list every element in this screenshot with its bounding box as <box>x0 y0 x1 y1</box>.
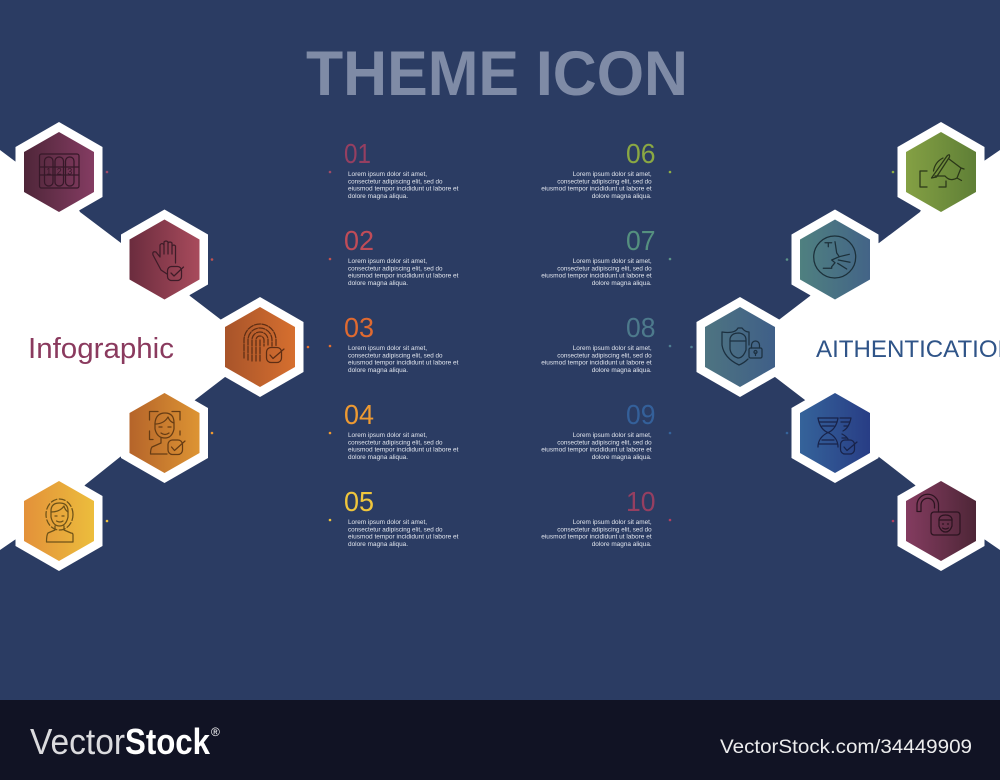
footer image id: VectorStock.com/34449909 <box>720 736 972 758</box>
item 03 <box>344 312 459 374</box>
title: THEME ICON <box>306 39 688 109</box>
item 07 <box>541 225 656 287</box>
item 10: eiusmod tempor incididunt ut labore et <box>541 534 652 541</box>
item 04: consectetur adipiscing elit, sed do <box>348 439 443 446</box>
item 01: dolore magna aliqua. <box>348 193 408 200</box>
item 02: Lorem ipsum dolor sit amet, <box>348 258 427 265</box>
item 08: dolore magna aliqua. <box>592 367 652 374</box>
heading: Infographic: Infographic <box>28 333 174 365</box>
item 04: dolore magna aliqua. <box>348 454 408 461</box>
icon: hand with check <box>153 241 184 280</box>
footer logo: Stock <box>125 721 211 762</box>
item 02 <box>344 225 459 287</box>
item 07: 07 <box>626 225 656 256</box>
item 09 <box>541 399 656 461</box>
item 04 <box>344 399 459 461</box>
item 10: consectetur adipiscing elit, sed do <box>557 526 652 533</box>
item 04: Lorem ipsum dolor sit amet, <box>348 432 427 439</box>
item 10: 10 <box>626 486 656 517</box>
item 05: 05 <box>344 486 374 517</box>
panel: left white zigzag <box>0 150 260 550</box>
hexagon 4: face scan <box>121 383 208 483</box>
item 05 <box>344 486 459 548</box>
item 02: eiusmod tempor incididunt ut labore et <box>348 273 459 280</box>
icon: hand writing <box>920 155 964 187</box>
icon: number lock: 2 <box>57 166 62 176</box>
item 09: eiusmod tempor incididunt ut labore et <box>541 447 652 454</box>
item 08: Lorem ipsum dolor sit amet, <box>573 345 652 352</box>
icon: face scan with check <box>150 412 185 454</box>
footer logo: Vector <box>30 721 125 762</box>
item 08: consectetur adipiscing elit, sed do <box>557 352 652 359</box>
item 09: Lorem ipsum dolor sit amet, <box>573 432 652 439</box>
item 10: Lorem ipsum dolor sit amet, <box>573 519 652 526</box>
item 03: 03 <box>344 312 374 343</box>
item 08: eiusmod tempor incididunt ut labore et <box>541 360 652 367</box>
hexagon 1: number lock <box>16 122 102 222</box>
item 01 <box>344 138 459 200</box>
item 01: eiusmod tempor incididunt ut labore et <box>348 186 459 193</box>
icon: fingerprint with check <box>244 324 284 362</box>
icon: open padlock with face <box>917 494 960 535</box>
item 10 <box>541 486 656 548</box>
item 07: eiusmod tempor incididunt ut labore et <box>541 273 652 280</box>
icon: number lock: 3 <box>67 166 72 176</box>
icon: DNA with check <box>818 418 857 454</box>
hexagon 5: face recognition <box>16 471 102 571</box>
hexagon 2: hand scan <box>121 210 208 310</box>
item 06: consectetur adipiscing elit, sed do <box>557 178 652 185</box>
item 05: dolore magna aliqua. <box>348 541 408 548</box>
item 02: dolore magna aliqua. <box>348 280 408 287</box>
item 06: dolore magna aliqua. <box>592 193 652 200</box>
icon: shield and padlock <box>722 328 762 365</box>
hexagon 7: voice recognition <box>792 210 878 310</box>
item 06: Lorem ipsum dolor sit amet, <box>573 171 652 178</box>
item 07: consectetur adipiscing elit, sed do <box>557 265 652 272</box>
item 01: consectetur adipiscing elit, sed do <box>348 178 443 185</box>
icon: number lock: 1 <box>46 166 51 176</box>
item 03: consectetur adipiscing elit, sed do <box>348 352 443 359</box>
hexagon 6: handwriting signature <box>898 122 984 222</box>
footer logo <box>30 721 220 762</box>
panel: right white zigzag <box>740 150 1000 550</box>
item 01: 01 <box>344 138 371 169</box>
hexagon 3: fingerprint <box>216 297 304 397</box>
footer bar <box>0 700 1000 780</box>
item 09: 09 <box>626 399 656 430</box>
item 06: 06 <box>626 138 656 169</box>
item 08 <box>541 312 656 374</box>
item 06: eiusmod tempor incididunt ut labore et <box>541 186 652 193</box>
footer logo: ® <box>211 725 220 739</box>
item 10: dolore magna aliqua. <box>592 541 652 548</box>
item 03: Lorem ipsum dolor sit amet, <box>348 345 427 352</box>
item 04: 04 <box>344 399 374 430</box>
item 05: eiusmod tempor incididunt ut labore et <box>348 534 459 541</box>
item 03: eiusmod tempor incididunt ut labore et <box>348 360 459 367</box>
hexagon 9: DNA <box>792 383 878 483</box>
item 06 <box>541 138 656 200</box>
item 05: consectetur adipiscing elit, sed do <box>348 526 443 533</box>
item 08: 08 <box>626 312 656 343</box>
item 01: Lorem ipsum dolor sit amet, <box>348 171 427 178</box>
icon: face in dashed outline <box>46 499 73 542</box>
hexagon 10: unlocked face lock <box>898 471 984 571</box>
connector dots <box>106 171 894 522</box>
item 07: Lorem ipsum dolor sit amet, <box>573 258 652 265</box>
item 04: eiusmod tempor incididunt ut labore et <box>348 447 459 454</box>
item 02: consectetur adipiscing elit, sed do <box>348 265 443 272</box>
icon: number lock <box>40 154 79 188</box>
item 03: dolore magna aliqua. <box>348 367 408 374</box>
item 02: 02 <box>344 225 374 256</box>
item 09: dolore magna aliqua. <box>592 454 652 461</box>
icon: speaking face in circle <box>814 236 856 278</box>
item 09: consectetur adipiscing elit, sed do <box>557 439 652 446</box>
item 05: Lorem ipsum dolor sit amet, <box>348 519 427 526</box>
item 07: dolore magna aliqua. <box>592 280 652 287</box>
hexagon 8: shield with lock <box>696 297 784 397</box>
